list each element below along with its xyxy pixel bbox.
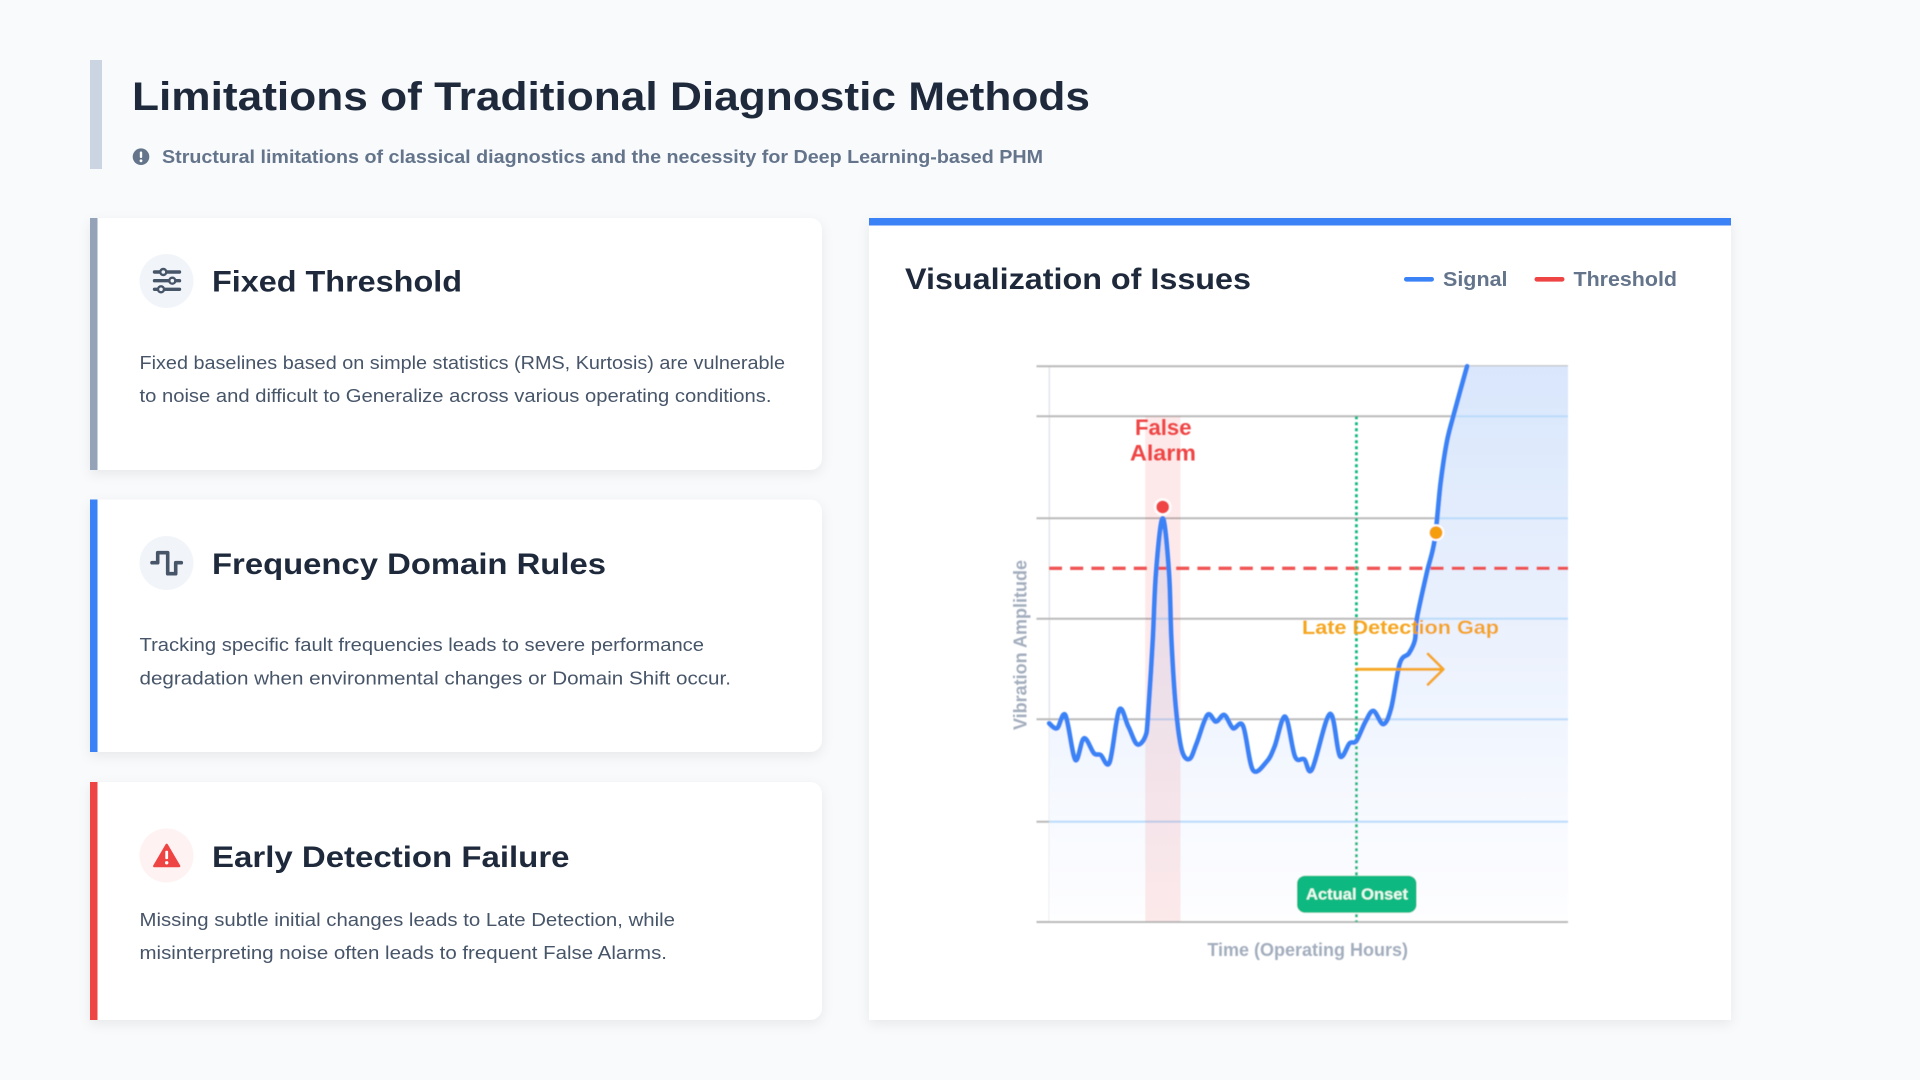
panel background xyxy=(869,218,1731,1020)
false alarm marker xyxy=(1155,500,1170,514)
card background xyxy=(90,782,822,1020)
card body text: Missing subtle initial changes leads to Late Detection, while xyxy=(140,909,675,930)
header xyxy=(90,60,1090,169)
card accent bar xyxy=(90,500,98,752)
panel: fixed threshold xyxy=(90,218,822,470)
line chart xyxy=(1010,366,1568,960)
icon: sliders xyxy=(140,254,194,308)
card body text xyxy=(140,909,675,963)
actual onset dotted line xyxy=(1355,416,1358,922)
subtitle: Structural limitations of classical diagnostics and the necessity for Deep Learning-based PHM xyxy=(162,147,1043,167)
actual onset badge: Actual Onset xyxy=(1306,886,1409,903)
card body text: degradation when environmental changes or Domain Shift occur. xyxy=(140,668,731,688)
card body text: Tracking specific fault frequencies leads to severe performance xyxy=(140,634,704,655)
false alarm highlight band xyxy=(1145,416,1180,921)
x axis label: Time (Operating Hours) xyxy=(1207,940,1408,960)
y axis line xyxy=(1048,366,1050,922)
false alarm label: Alarm xyxy=(1130,441,1196,466)
legend: Threshold xyxy=(1574,269,1677,291)
x axis line xyxy=(1036,921,1568,923)
card background xyxy=(90,218,822,470)
grid lines tinted inside area xyxy=(1036,416,1568,822)
late detection marker xyxy=(1429,525,1443,540)
legend: Signal xyxy=(1443,269,1508,291)
card accent bar xyxy=(90,782,98,1020)
actual onset badge xyxy=(1297,876,1416,913)
threshold dashed line xyxy=(1049,567,1568,570)
legend xyxy=(1404,269,1677,291)
icon: pulse wave xyxy=(140,536,194,590)
card heading: Frequency Domain Rules xyxy=(212,548,606,581)
signal area fill xyxy=(1049,366,1568,922)
card background xyxy=(90,500,822,752)
icon: subtitle info xyxy=(133,148,149,165)
panel: frequency domain rules xyxy=(90,500,822,752)
card body text: to noise and difficult to Generalize across various operating conditions. xyxy=(140,385,772,406)
card heading: Early Detection Failure xyxy=(212,841,570,874)
card body text: Fixed baselines based on simple statistics (RMS, Kurtosis) are vulnerable xyxy=(140,352,785,373)
panel top bar xyxy=(869,218,1731,226)
card heading: Fixed Threshold xyxy=(212,266,462,298)
signal line xyxy=(1049,366,1467,772)
panel: visualization of issues xyxy=(869,218,1731,1020)
card body text xyxy=(140,352,785,406)
card body text xyxy=(140,634,731,688)
y axis label: Vibration Amplitude xyxy=(1010,560,1030,730)
header accent bar xyxy=(90,60,102,169)
panel heading: Visualization of Issues xyxy=(905,263,1251,296)
horizontal grid lines xyxy=(1036,366,1568,822)
false alarm label xyxy=(1130,415,1196,466)
card body text: misinterpreting noise often leads to frequent False Alarms. xyxy=(140,942,667,963)
arrow: late detection gap xyxy=(1356,654,1443,684)
false alarm label: False xyxy=(1135,415,1192,440)
title: Limitations of Traditional Diagnostic Methods xyxy=(132,75,1090,119)
card accent bar xyxy=(90,218,98,470)
icon: warning triangle xyxy=(140,828,194,882)
panel: early detection failure xyxy=(90,782,822,1020)
late detection gap label: Late Detection Gap xyxy=(1302,618,1499,639)
